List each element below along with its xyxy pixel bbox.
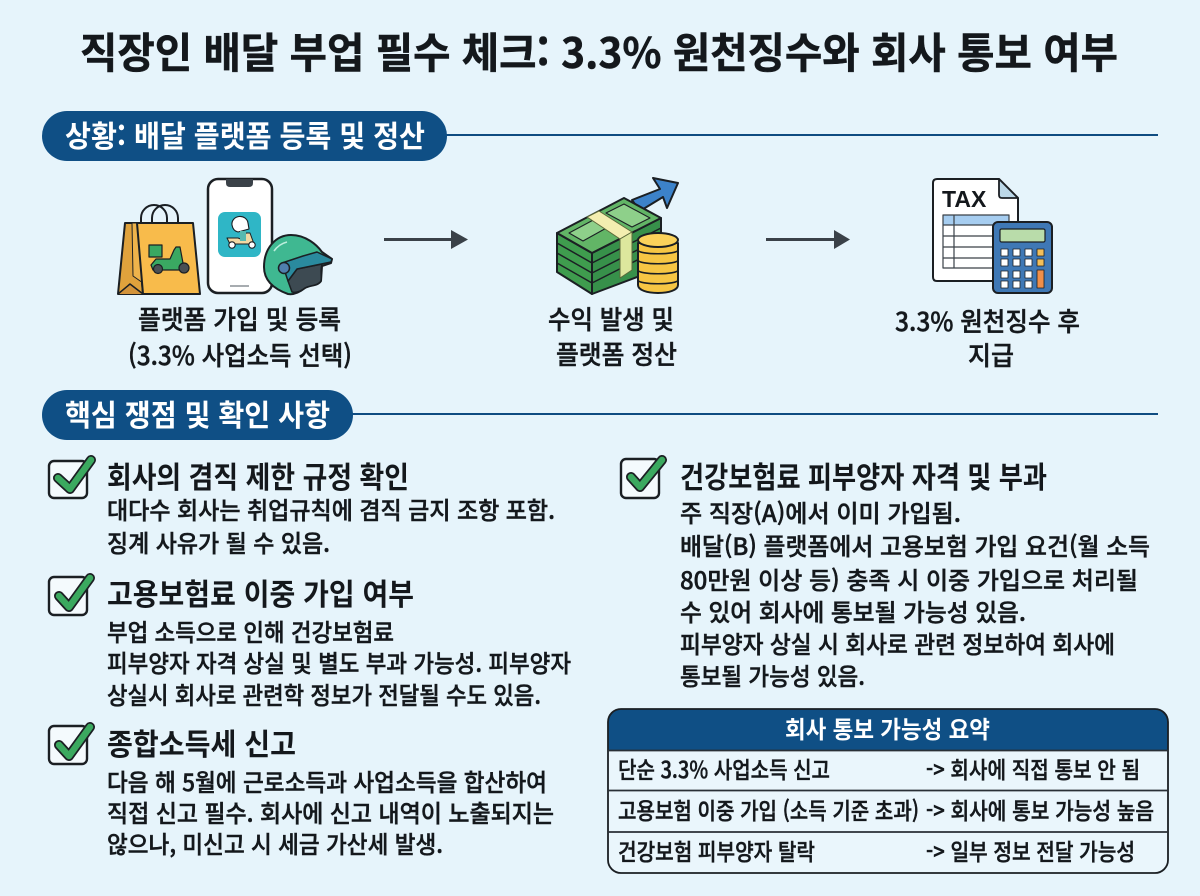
body text: [107, 613, 571, 711]
table row 1: 단순 3.3% 사업소득 신고: [618, 751, 830, 785]
body text: 수 있어 회사에 통보될 가능성 있음.: [680, 593, 1026, 628]
section heading: key issues: 핵심 쟁점 및 확인 사항: [65, 391, 330, 435]
table row 2: 고용보험 이중 가입 (소득 기준 초과): [618, 792, 919, 826]
heading: 종합소득세 신고: [107, 720, 296, 764]
caption: step 2: [548, 300, 677, 372]
section heading: situation: [42, 111, 1158, 161]
body text: 통보될 가능성 있음.: [680, 657, 865, 692]
section heading: key issues: [42, 390, 1158, 440]
table row 2: -> 회사에 통보 가능성 높음: [926, 792, 1154, 826]
caption: step 3: [895, 302, 1080, 373]
icon: coin stack: [638, 233, 678, 293]
body text: [680, 494, 1150, 692]
body text: 부업 소득으로 인해 건강보험료: [107, 613, 394, 648]
body text: 않으나, 미신고 시 세금 가산세 발생.: [107, 825, 443, 860]
section heading: situation: 상황: 배달 플랫폼 등록 및 정산: [65, 112, 425, 156]
caption: step 3: 3.3% 원천징수 후: [895, 302, 1080, 339]
table row 1: -> 회사에 직접 통보 안 됨: [926, 751, 1140, 785]
table row 3: -> 일부 정보 전달 가능성: [926, 833, 1135, 867]
icon: smartphone: [208, 179, 272, 293]
caption: step 2: 플랫폼 정산: [556, 335, 677, 372]
table row 3: [618, 833, 1135, 867]
icon: cash stack: [557, 198, 661, 294]
body text: 상실시 회사로 관련학 정보가 전달될 수도 있음.: [107, 676, 541, 711]
icon: checkbox: [49, 577, 90, 615]
title: 직장인 배달 부업 필수 체크: 3.3% 원천징수와 회사 통보 여부: [80, 20, 1118, 81]
arrow: step 1 to step 2: [384, 230, 468, 249]
item: employment insurance: [49, 570, 571, 711]
caption: step 1: [128, 300, 352, 373]
heading: 건강보험료 피부양자 자격 및 부과: [680, 453, 1047, 497]
body text: 80만원 이상 등) 충족 시 이중 가입으로 처리될: [680, 561, 1138, 596]
panel: company notification summary table: [608, 709, 1168, 873]
icon: helmet: [264, 235, 332, 294]
body text: 징계 사유가 될 수 있음.: [107, 524, 330, 559]
icon: cash stack, coins and growth arrow: [557, 178, 678, 294]
caption: step 1: (3.3% 사업소득 선택): [128, 336, 352, 373]
table row 1: [618, 751, 1140, 785]
heading: 고용보험료 이중 가입 여부: [107, 570, 414, 614]
body text: 주 직장(A)에서 이미 가입됨.: [680, 494, 961, 529]
caption: step 1: 플랫폼 가입 및 등록: [138, 300, 341, 337]
icon: shopping bag: [118, 205, 200, 294]
icon: shopping bag, phone and helmet: [118, 179, 332, 294]
icon: tax document: TAX: [942, 186, 987, 212]
item: health insurance dependent: [621, 453, 1150, 692]
icon: checkbox: [49, 460, 91, 498]
icon: tax document and calculator: [933, 179, 1052, 293]
table row 3: 건강보험 피부양자 탈락: [618, 833, 815, 867]
caption: step 3: 지급: [968, 336, 1014, 373]
body text: 다음 해 5월에 근로소득과 사업소득을 합산하여: [107, 763, 547, 798]
body text: [107, 491, 555, 559]
icon: calculator: [993, 222, 1052, 293]
body text: 직접 신고 필수. 회사에 신고 내역이 노출되지는: [107, 794, 554, 829]
body text: 피부양자 상실 시 회사로 관련 정보하여 회사에: [680, 625, 1115, 660]
body text: [107, 763, 554, 860]
body text: 대다수 회사는 취업규칙에 겸직 금지 조항 포함.: [107, 491, 555, 526]
body text: 배달(B) 플랫폼에서 고용보험 가입 요건(월 소득: [680, 527, 1150, 562]
heading: 회사의 겸직 제한 규정 확인: [107, 453, 409, 497]
icon: checkbox: [49, 726, 90, 764]
body text: 피부양자 자격 상실 및 별도 부과 가능성. 피부양자: [107, 644, 571, 679]
table row 2: [618, 792, 1154, 826]
arrow: step 2 to step 3: [766, 230, 850, 249]
item: side job restriction: [49, 453, 555, 559]
caption: step 2: 수익 발생 및: [548, 300, 674, 337]
icon: checkbox: [621, 459, 662, 498]
icon: growth arrow: [632, 178, 678, 211]
table header: 회사 통보 가능성 요약: [785, 710, 990, 745]
item: income tax filing: [49, 720, 554, 860]
